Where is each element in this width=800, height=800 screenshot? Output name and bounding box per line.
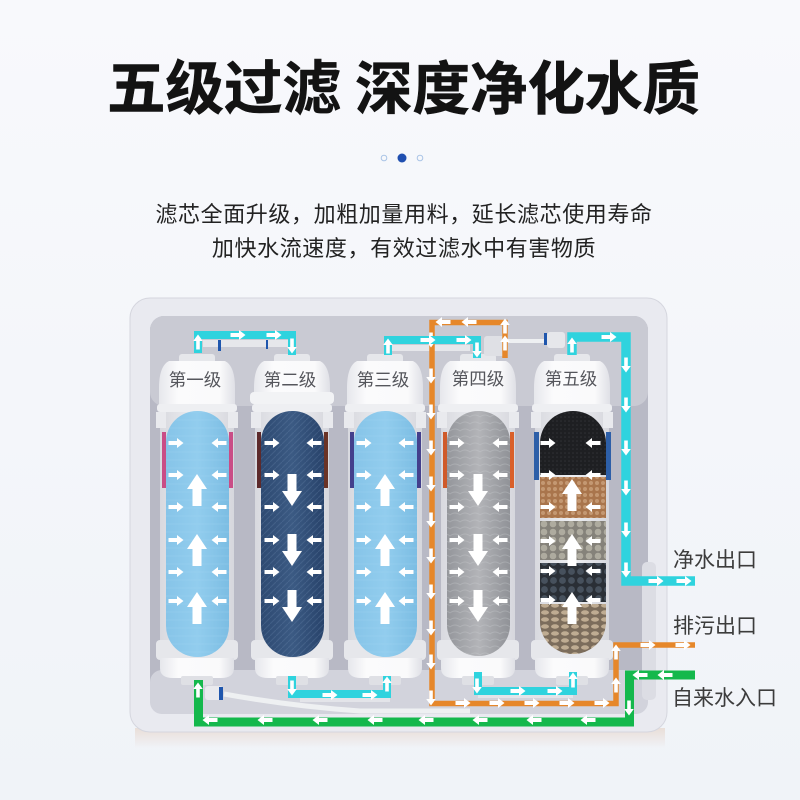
- title: 五级过滤: [107, 57, 341, 122]
- description text: [155, 202, 653, 261]
- filter 5: [531, 354, 613, 685]
- orange drain pipe: [426, 317, 695, 708]
- cyan outlet pipe: [567, 332, 695, 586]
- green inlet pipe: [193, 670, 695, 725]
- filter 3: 第三级: [357, 370, 409, 390]
- description text: 加快水流速度，有效过滤水中有害物质: [212, 236, 596, 261]
- cyan pipe: filter 1 to filter 2: [193, 330, 297, 355]
- activated carbon layer: [540, 411, 606, 475]
- label: clean water outlet: 净水出口: [673, 549, 757, 572]
- filter 5: 第五级: [545, 369, 597, 389]
- fittings and white hose: [203, 332, 656, 711]
- cyan pipe: filter 4 to filter 5: [472, 672, 578, 696]
- filter 2: [250, 354, 334, 685]
- pagination dots: [381, 154, 423, 162]
- tray shadow: [135, 728, 665, 748]
- cyan pipe: filter 3 to filter 4: [383, 335, 482, 358]
- filter 4: 第四级: [452, 369, 504, 389]
- filter 3: [344, 354, 426, 685]
- purifier tray: [130, 298, 667, 732]
- title: 深度净化水质: [355, 58, 700, 122]
- filter 1: [156, 354, 238, 685]
- filter 1: 第一级: [169, 370, 221, 390]
- description text: 滤芯全面升级，加粗加量用料，延长滤芯使用寿命: [155, 202, 653, 227]
- cyan pipe: filter 2 to filter 3: [287, 676, 392, 700]
- label: tap water inlet: 自来水入口: [672, 687, 777, 710]
- title: [107, 57, 700, 122]
- filter 4: [437, 354, 519, 685]
- label: waste water outlet: 排污出口: [673, 615, 757, 638]
- filter 2: 第二级: [264, 370, 316, 390]
